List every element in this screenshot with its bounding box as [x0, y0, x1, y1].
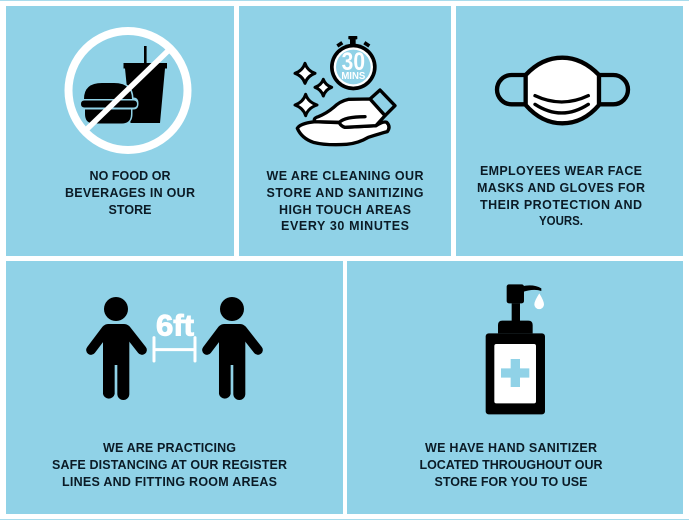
- text: no food: BEVERAGES IN OUR: [65, 186, 195, 200]
- text: no food: STORE: [108, 203, 152, 217]
- panel: cleaning: [239, 6, 451, 256]
- text: safe distancing: [52, 441, 287, 489]
- text: cleaning: STORE AND SANITIZING: [266, 186, 424, 200]
- text: cleaning: [266, 169, 424, 233]
- text: no food: NO FOOD OR: [90, 169, 170, 183]
- text: hand sanitizer: [420, 441, 602, 489]
- icon: hands and bottle: [297, 90, 395, 145]
- droplet: [534, 293, 544, 309]
- text: safe distancing: SAFE DISTANCING AT OUR REGISTER: [52, 458, 287, 472]
- text: safe distancing: LINES AND FITTING ROOM AREAS: [62, 475, 277, 489]
- text: cleaning: EVERY 30 MINUTES: [281, 219, 409, 233]
- stopwatch: [330, 36, 377, 90]
- icon: no food or drink: [68, 31, 188, 150]
- text: hand sanitizer: LOCATED THROUGHOUT OUR: [420, 458, 602, 472]
- text: face masks: MASKS AND GLOVES FOR: [477, 181, 645, 195]
- panel: no food or beverages: [6, 6, 234, 256]
- text: hand sanitizer: WE HAVE HAND SANITIZER: [425, 441, 597, 455]
- icon: stopwatch and sparkles: [295, 36, 377, 116]
- text: face masks: [477, 164, 645, 228]
- icon: sanitizer bottle: [486, 284, 545, 414]
- panel: face masks: [456, 6, 683, 256]
- icon: face mask: [497, 58, 628, 123]
- distance marker: [154, 338, 195, 361]
- text: safe distancing: WE ARE PRACTICING: [103, 441, 236, 455]
- text: face masks: YOURS.: [539, 214, 583, 228]
- person left: [91, 297, 142, 400]
- text: cleaning: HIGH TOUCH AREAS: [279, 203, 411, 217]
- sparkles: [295, 63, 332, 116]
- text: no food: [65, 169, 195, 217]
- text: hand sanitizer: STORE FOR YOU TO USE: [434, 475, 588, 489]
- text: face masks: EMPLOYEES WEAR FACE: [480, 164, 642, 178]
- text: face masks: THEIR PROTECTION AND: [480, 198, 642, 212]
- panel: safe distancing: [6, 261, 343, 514]
- panel: hand sanitizer: [347, 261, 683, 514]
- icon: two people six feet apart: [91, 297, 258, 400]
- text: cleaning: WE ARE CLEANING OUR: [266, 169, 424, 183]
- stopwatch: 30: [342, 48, 365, 76]
- stopwatch: MINS: [341, 71, 366, 82]
- person right: [207, 297, 258, 400]
- icon: two people six feet apart: 6ft: [156, 309, 194, 342]
